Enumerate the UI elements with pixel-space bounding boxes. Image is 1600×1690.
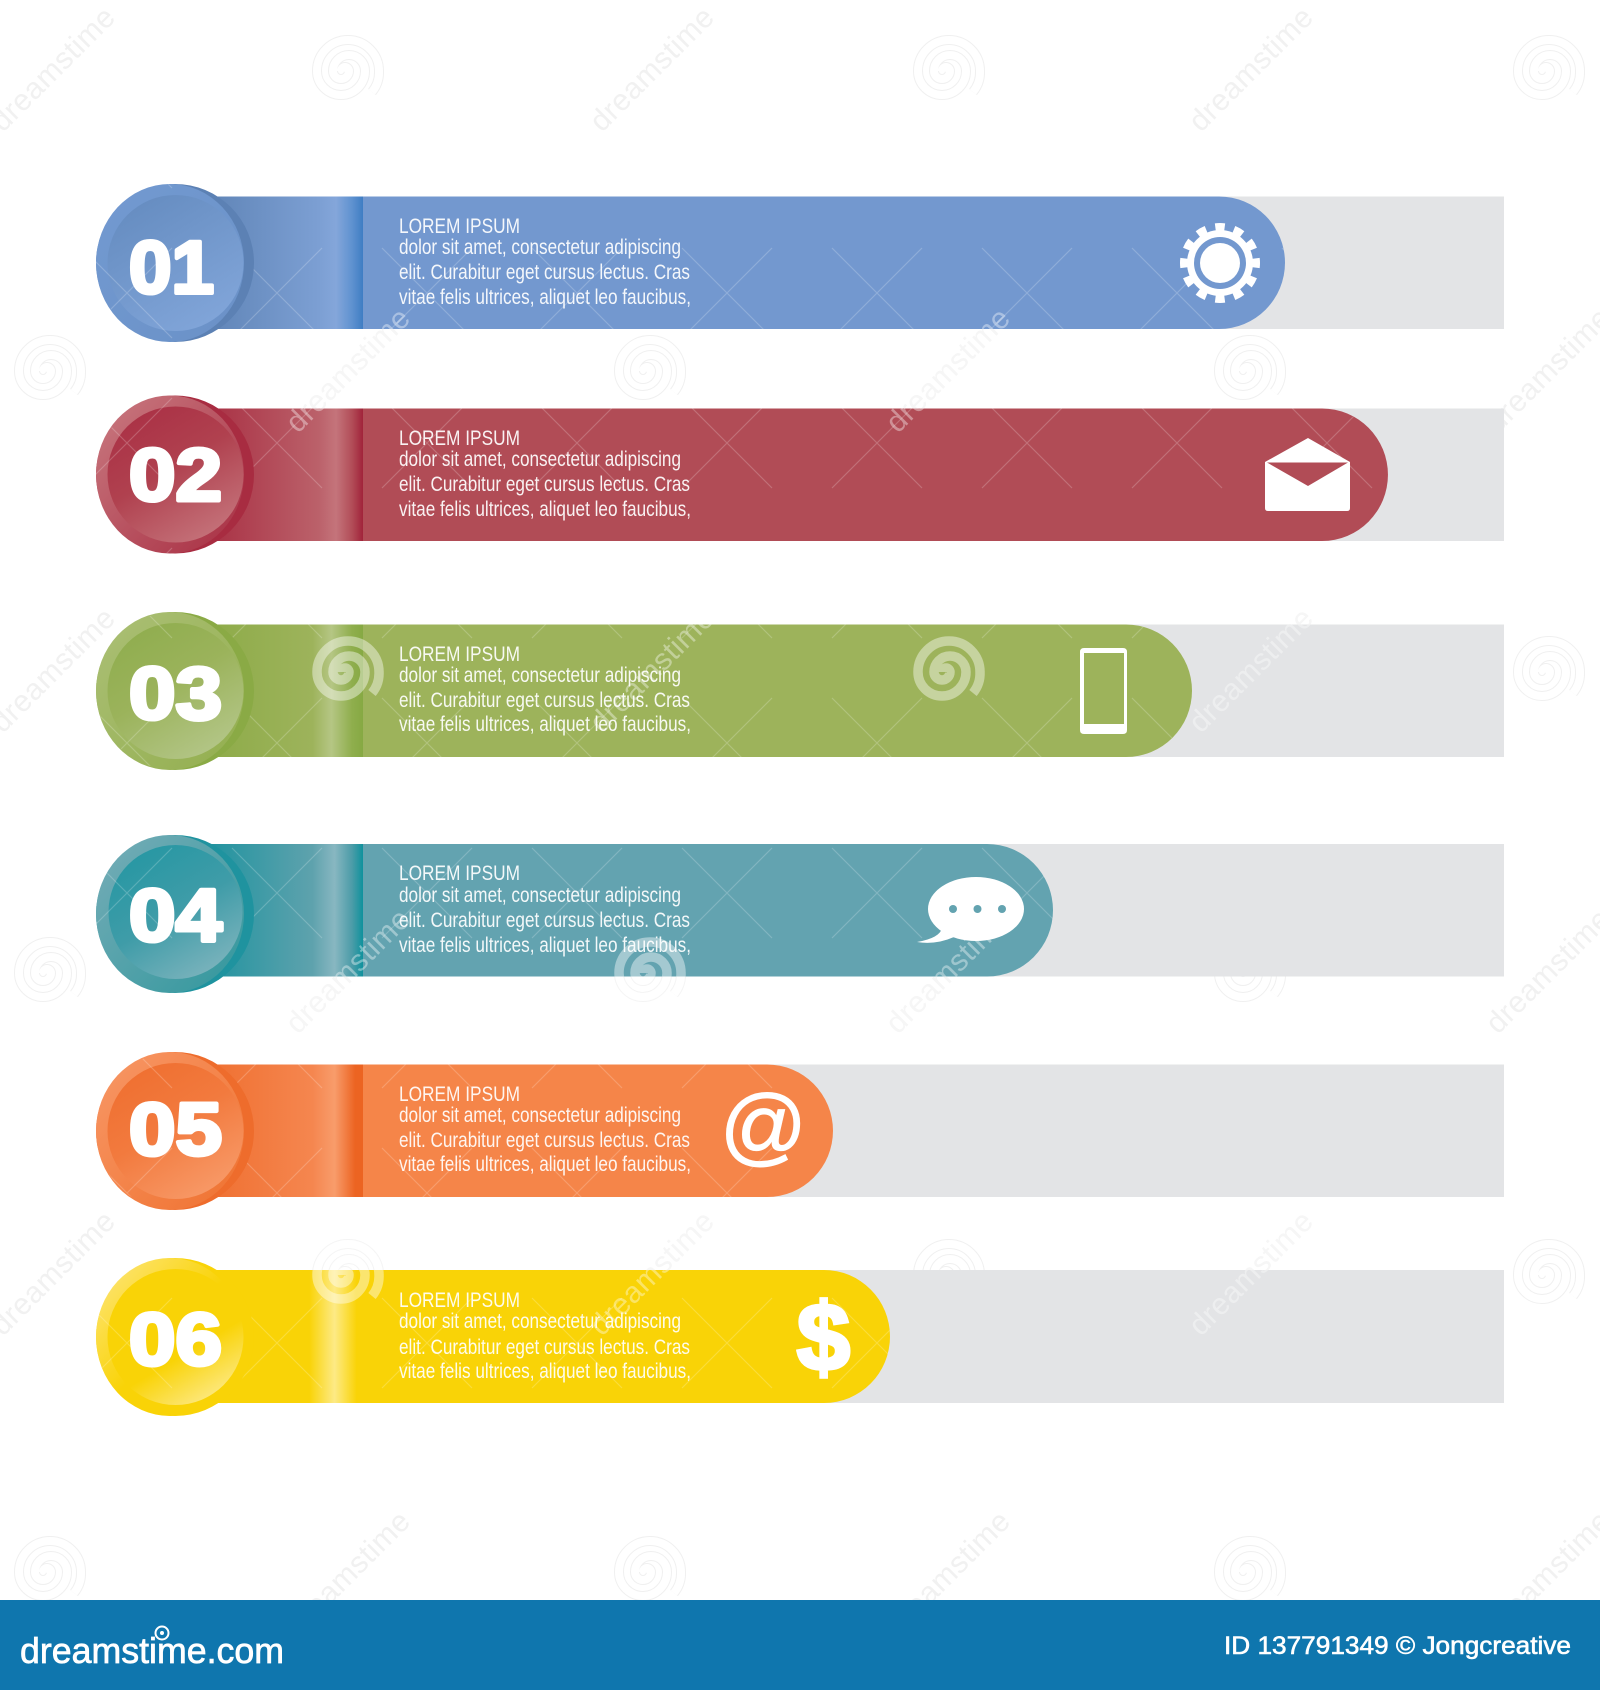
progress bar 01 [205,196,1285,329]
text block 02: elit. Curabitur eget cursus lectus. Cras [399,473,690,496]
watermark: faint spirals and wordmarks on white: dreamstime [879,301,1017,439]
text block 06: LOREM IPSUM [399,1289,520,1312]
text block 02: dolor sit amet, consectetur adipiscing [399,448,681,471]
text block 05: elit. Curabitur eget cursus lectus. Cras [399,1129,690,1152]
text block 03: vitae felis ultrices, aliquet leo faucibus, [399,713,691,736]
icon: smartphone [1080,648,1127,734]
number badge 05 [96,1052,833,1210]
track 01 [205,196,1504,329]
text block 04: dolor sit amet, consectetur adipiscing [399,884,681,907]
text block 01: vitae felis ultrices, aliquet leo faucibus, [399,286,691,309]
track 03 [205,624,1504,757]
text block 01: elit. Curabitur eget cursus lectus. Cras [399,261,690,284]
track 02 [205,408,1504,541]
watermark: translucent spirals and wordmarks over the bars: dreamstime [1182,1204,1320,1342]
progress bar 04 [205,844,1053,976]
track 06 [205,1270,1504,1403]
icon: speech bubble [917,877,1024,943]
progress bar 02 [205,408,1388,541]
number badge 01: 01 [129,226,214,309]
watermark: translucent spirals and wordmarks over the bars: dreamstime [583,601,721,739]
number badge 06: 06 [129,1298,222,1381]
panel: row 04 [96,835,1504,993]
track 04 [205,844,1504,976]
watermark: faint spirals and wordmarks on white: dreamstime [1182,601,1320,739]
text block 06: dolor sit amet, consectetur adipiscing [399,1310,681,1333]
icon: dollar sign: $ [797,1284,850,1391]
text block 05 [399,1083,691,1176]
icon: gear [1185,228,1255,298]
panel: row 05 [96,1052,1504,1210]
watermark: faint spirals and wordmarks on white: dreamstime [879,1504,1017,1642]
icon: at sign: @ [718,1078,806,1174]
number badge 06 [96,1258,890,1416]
text block 02: vitae felis ultrices, aliquet leo faucibus, [399,498,691,521]
number badge 02: 02 [129,434,222,516]
progress bar 05 [205,1064,833,1197]
track 05 [205,1064,1504,1197]
text block 03: dolor sit amet, consectetur adipiscing [399,664,681,687]
number badge 04: 04 [129,874,222,957]
text block 04: vitae felis ultrices, aliquet leo faucibus, [399,934,691,957]
fold 01 [205,196,363,329]
number badge 01 [96,184,1285,342]
progress bar 03 [205,624,1192,757]
panel: row 06 [96,1258,1504,1416]
fold 02 [205,408,363,541]
footer credit: ID 137791349 © Jongcreative [1224,1632,1571,1660]
watermark: translucent spirals and wordmarks over the bars: dreamstime [583,1204,721,1342]
panel: row 02 [96,396,1504,554]
text block 04: LOREM IPSUM [399,862,520,885]
watermark: translucent spirals and wordmarks over the bars [279,301,1320,1342]
text block 01 [399,215,691,309]
number badge 02 [96,396,1388,554]
text block 03: elit. Curabitur eget cursus lectus. Cras [399,689,690,712]
text block 03: LOREM IPSUM [399,643,520,666]
text block 06 [399,1289,691,1383]
text block 02 [399,427,691,521]
watermark: translucent spirals and wordmarks over the bars: dreamstime [879,301,1017,439]
number badge 03 [96,612,1192,770]
fold 04 [205,844,363,976]
watermark: translucent spirals and wordmarks over the bars: dreamstime [1182,601,1320,739]
number badge 03: 03 [129,652,222,735]
text block 05: LOREM IPSUM [399,1083,520,1106]
watermark: faint spirals and wordmarks on white: dreamstime [279,301,417,439]
watermark: translucent spirals and wordmarks over the bars: dreamstime [279,301,417,439]
fold 05 [205,1064,363,1197]
footer logo: dreamstime.com [20,1630,284,1671]
text block 01: LOREM IPSUM [399,215,520,238]
fold 03 [205,624,363,757]
watermark: translucent spirals and wordmarks over the bars: dreamstime [879,902,1017,1040]
progress bar 06 [205,1270,890,1403]
text block 04: elit. Curabitur eget cursus lectus. Cras [399,909,690,932]
text block 06: elit. Curabitur eget cursus lectus. Cras [399,1336,690,1359]
fold 06 [205,1270,363,1403]
panel: row 01 [96,184,1504,342]
watermark: faint spirals and wordmarks on white: dreamstime [879,902,1017,1040]
number badge 04 [96,835,1053,993]
watermark: faint spirals and wordmarks on white: dreamstime [279,1504,417,1642]
watermark: faint spirals and wordmarks on white: dreamstime [583,1204,721,1342]
panel: row 03 [96,612,1504,770]
watermark: faint spirals and wordmarks on white: dreamstime [1182,1204,1320,1342]
watermark: faint spirals and wordmarks on white: dreamstime [279,902,417,1040]
text block 03 [399,643,691,736]
text block 01: dolor sit amet, consectetur adipiscing [399,236,681,259]
icon: envelope [1265,438,1350,511]
watermark: faint spirals and wordmarks on white: dreamstime [583,0,721,138]
watermark: faint spirals and wordmarks on white: dreamstime [1182,0,1320,138]
watermark: translucent spirals and wordmarks over the bars: dreamstime [279,902,417,1040]
text block 04 [399,862,691,957]
text block 02: LOREM IPSUM [399,427,520,450]
text block 05: vitae felis ultrices, aliquet leo faucibus, [399,1153,691,1176]
number badge 05: 05 [129,1088,222,1171]
footer bar [0,1600,1600,1690]
text block 05: dolor sit amet, consectetur adipiscing [399,1104,681,1127]
text block 06: vitae felis ultrices, aliquet leo faucibus, [399,1360,691,1383]
